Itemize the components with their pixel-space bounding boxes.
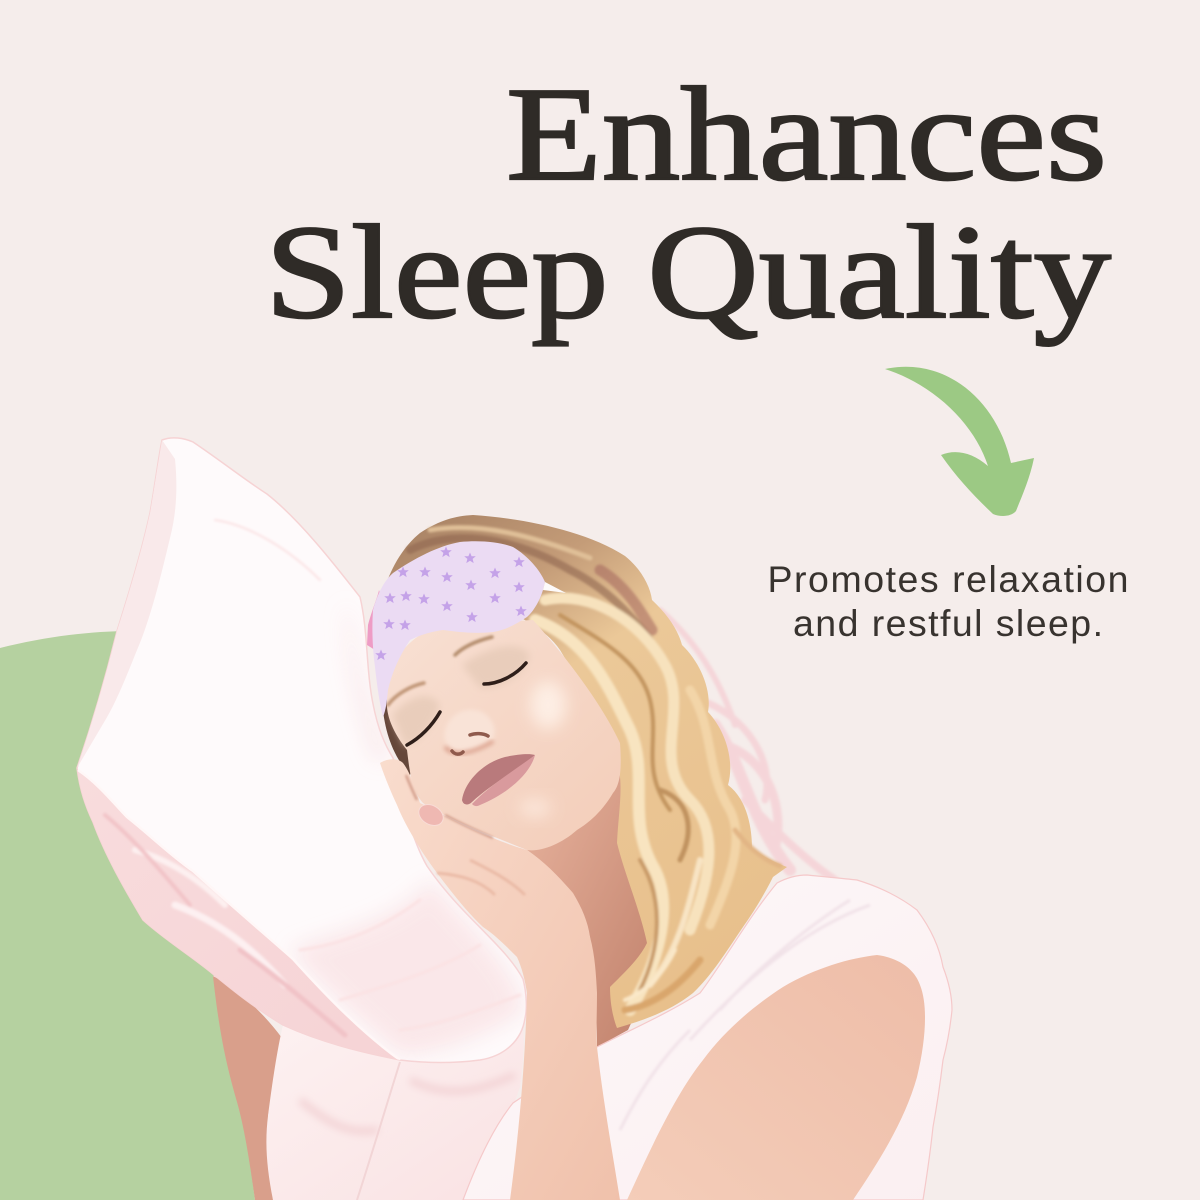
green circle shape [0,631,300,1200]
palm crease [437,860,525,895]
shirt [463,875,952,1200]
neck [527,775,662,1047]
pink hair wisps [660,610,835,880]
far arm [627,955,925,1200]
sleep mask [367,541,566,717]
jaw highlight [519,799,551,817]
hair strands [410,528,780,1010]
back hand holding pillow [213,976,282,1200]
title: Enhances [506,60,1107,208]
caption text: and restful sleep. [793,602,1103,644]
lower pillow section [266,1025,524,1200]
arrow [885,367,1034,516]
lips [462,754,535,806]
hair [384,515,787,1028]
pillow left gusset [77,440,176,768]
pillow folds [105,520,520,1035]
mask stars [375,546,527,660]
pillow [77,438,526,1063]
eyebrow left [388,683,424,705]
pillow underside band [78,770,400,1060]
title: Sleep Quality [265,198,1111,346]
woman with pillow illustration [77,438,952,1200]
pillow seam [78,770,400,1060]
eye socket shadow left [392,696,440,745]
cheek highlight [530,681,566,729]
closed eye right [484,663,526,684]
mask strap tie [367,590,382,650]
caption text: Promotes relaxation [768,558,1128,600]
caption text [768,558,1128,644]
eye socket shadow right [462,646,530,688]
nose shadow [446,742,492,753]
hand and forearm [380,759,620,1200]
hair shadow beside left eye [382,690,420,775]
eyebrow right [455,637,492,655]
nostrils [452,734,488,754]
fingernail [415,800,447,830]
nose [444,710,495,754]
pillow soft shading [298,700,522,1056]
title [265,60,1111,346]
closed eye left [407,712,440,745]
face [387,620,621,850]
shadow between hand and cheek [406,775,493,838]
